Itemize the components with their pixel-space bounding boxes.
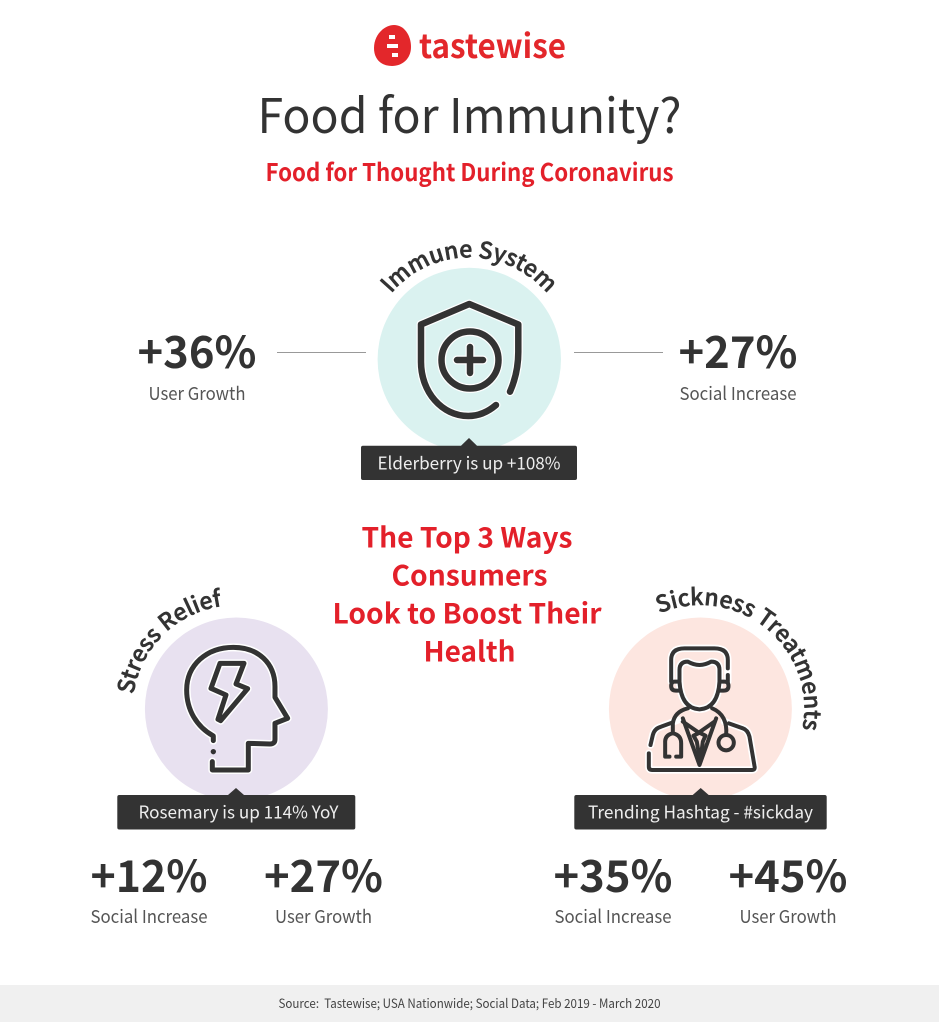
sickness curved label: Sickness Treatments [656,586,821,730]
face [679,662,719,709]
stat: +45% user growth: +45% [728,841,848,905]
icon: shield with plus [421,304,518,416]
title: Food for Immunity? [258,77,682,147]
heading: top 3 ways [332,516,602,670]
heading: top 3 ways: Look to Boost Their [332,592,602,632]
stat: +36% user growth: User Growth [148,380,246,406]
sickness circle [609,618,792,800]
stat: +45% user growth: User Growth [740,903,836,929]
coat [649,722,755,770]
stethoscope [665,708,726,757]
stress curved label: Stress Relief [117,588,220,694]
heading: top 3 ways: Health [424,630,516,670]
icon: head with lightning bolt [187,647,288,770]
callout: elderberry: Elderberry is up +108% [378,450,560,476]
ears [671,682,728,691]
panel: immune system [361,241,577,480]
callout: elderberry [361,438,577,480]
lapels [683,718,716,765]
stat: +27% social increase: Social Increase [680,380,797,406]
stat: +27% user growth: User Growth [275,903,372,929]
icon: logo egg [374,25,411,66]
panel: sickness treatments [574,586,827,830]
stat: +12% social increase: +12% [90,841,208,905]
panel: stress relief [117,588,356,830]
logo: tastewise [374,20,566,68]
footer source bar [0,985,939,1022]
immune circle [378,268,561,451]
callout: rosemary: Rosemary is up 114% YoY [138,800,339,824]
logo wordmark: tastewise [419,20,566,68]
collar and tie [683,722,714,762]
stat: +35% social increase: Social Increase [554,903,672,929]
subtitle: Food for Thought During Coronavirus [266,153,674,188]
heading: top 3 ways: Consumers [392,554,548,594]
hair [671,648,728,682]
connector lines [277,352,663,354]
callout: trending hashtag [574,788,827,830]
stat: +27% social increase: +27% [678,317,798,381]
footer source bar: Source: Tastewise; USA Nationwide; Social Data; Feb 2019 - March 2020 [278,993,661,1012]
immune curved label: Immune System [380,241,554,292]
callout: trending hashtag: Trending Hashtag - #sickday [588,800,813,824]
callout: rosemary [117,788,355,830]
stat: +27% user growth: +27% [264,841,383,905]
stat: +36% user growth: +36% [138,317,256,381]
stat: +12% social increase: Social Increase [90,903,208,929]
stress circle [145,618,328,800]
icon: doctor [649,648,755,770]
heading: top 3 ways: The Top 3 Ways [362,516,572,556]
stat: +35% social increase: +35% [554,841,672,905]
